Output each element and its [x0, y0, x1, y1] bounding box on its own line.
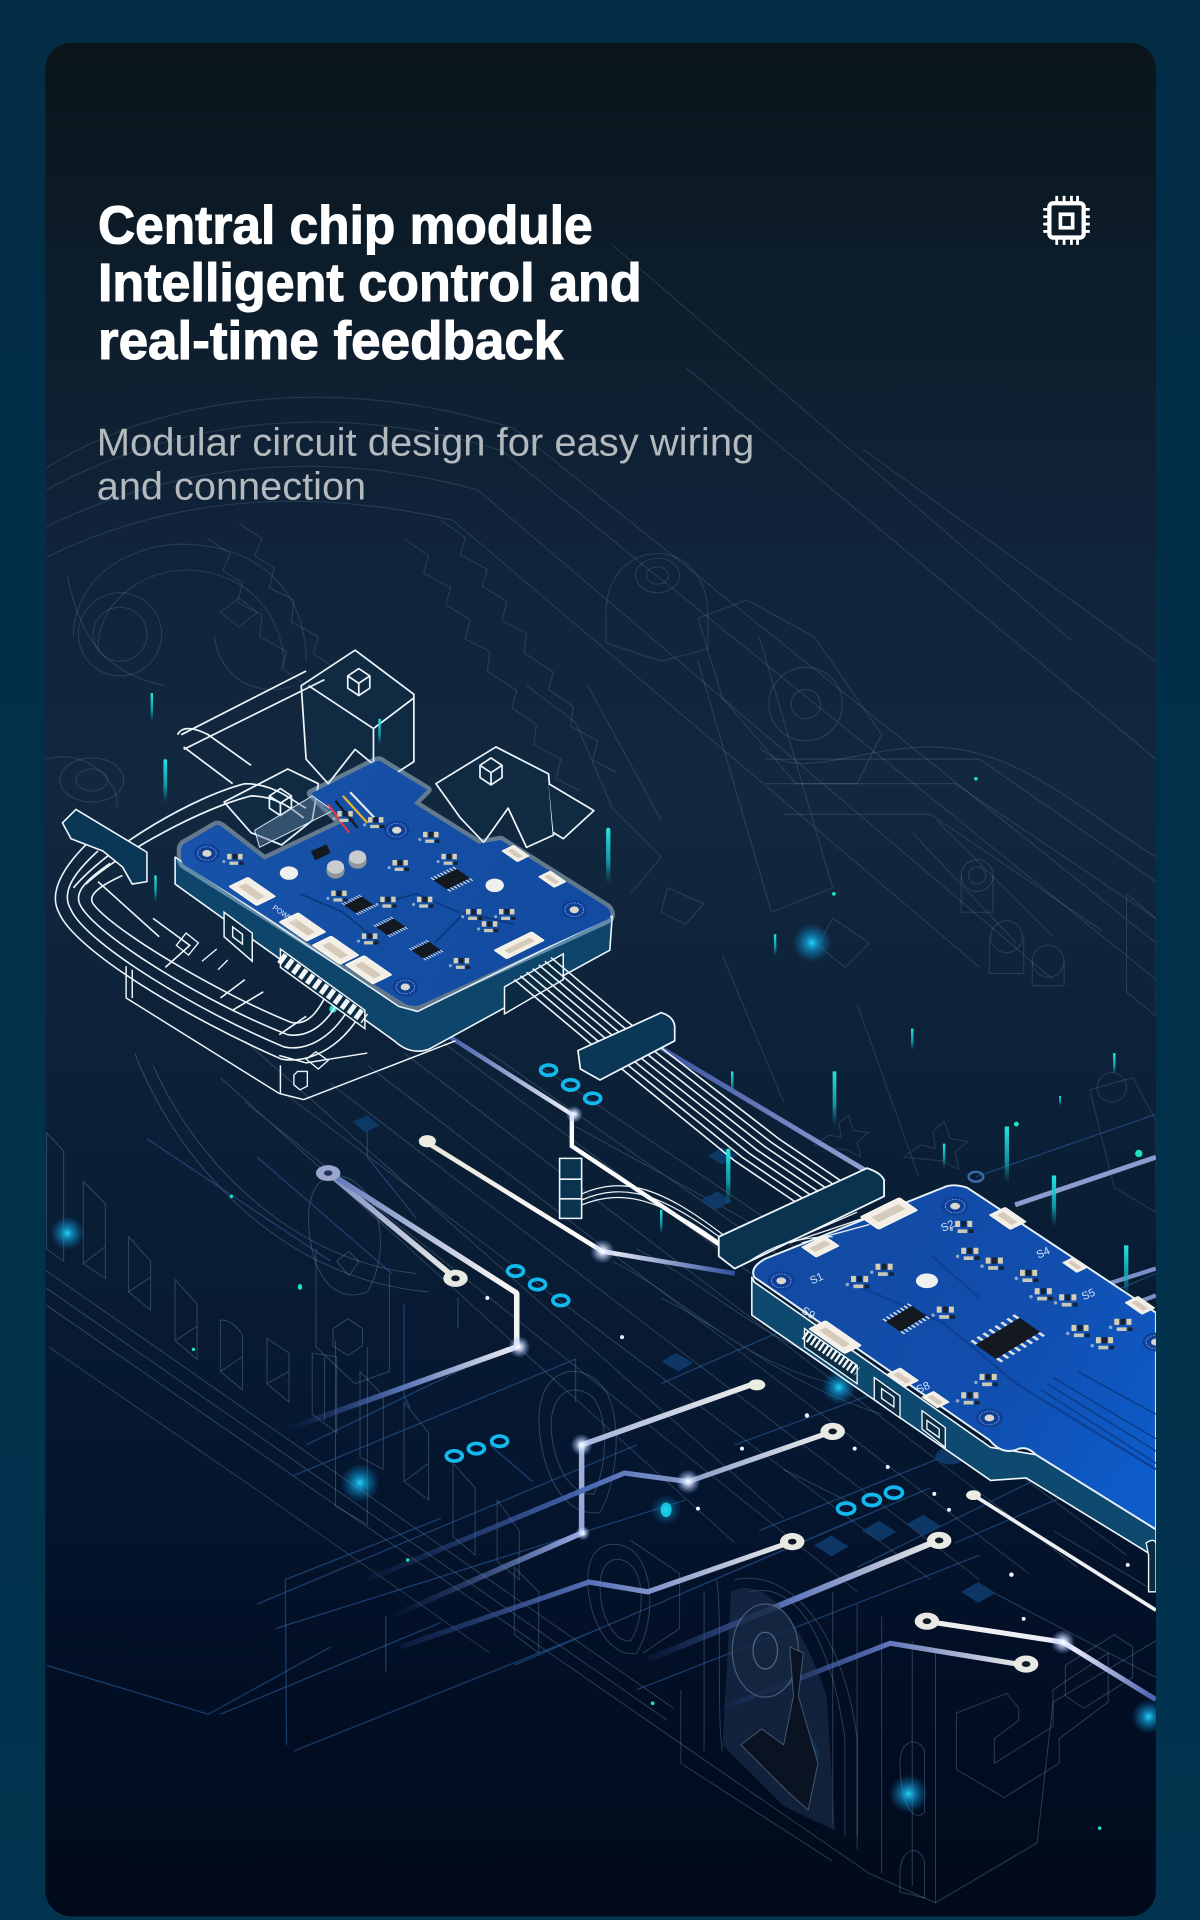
board labels: [799, 1218, 1097, 1396]
circuit trace upper right: [1015, 1157, 1156, 1205]
dark PCB traces: [300, 894, 514, 943]
glow spots: [50, 923, 1166, 1813]
white connectors: [802, 1198, 1155, 1408]
small diamond pads: [353, 1116, 996, 1603]
circuit trace lower right one: [926, 1621, 1156, 1700]
board labels: S9: [799, 1305, 817, 1322]
cable clip: [578, 1013, 675, 1080]
mounting holes: [194, 821, 587, 996]
mounting holes: [768, 1197, 1169, 1427]
board labels: S5: [1080, 1287, 1097, 1303]
subtitle: and connection: [97, 466, 366, 509]
circuit trace beside cable: [649, 1041, 884, 1182]
labels on bracket: [176, 933, 328, 1090]
white holes: [280, 866, 504, 892]
white hole: [916, 1273, 938, 1288]
circuit trace ring to ring: [332, 1180, 450, 1274]
circuit trace lower middle one: [386, 1384, 754, 1619]
small SMD parts: [222, 811, 516, 969]
transparent slot: [255, 796, 333, 847]
title: Central chip module: [98, 196, 593, 256]
connectors: [229, 845, 566, 984]
circuit trace right middle: [1110, 1266, 1156, 1302]
capacitors: [311, 844, 367, 879]
hard-disk style part with arm: [722, 1588, 835, 1831]
servo boxes and wire loops on first board: [73, 650, 594, 888]
board text POWER: POWER: [271, 903, 299, 926]
chips: [343, 868, 472, 959]
trace bend glints: [508, 1106, 1075, 1654]
title: [98, 196, 642, 371]
cyan vertical light bars: [151, 693, 1128, 1297]
cable between clip and board: [749, 1212, 869, 1261]
first board PCB: [181, 761, 611, 1006]
circuit trace behind cable: [448, 1036, 722, 1247]
board labels: S4: [1035, 1245, 1052, 1262]
wireframe: lower diagonal rails and boxes: [47, 1053, 1156, 1903]
circuit trace lower middle four: [649, 1540, 938, 1659]
servo box left: [224, 769, 318, 845]
board labels: S2: [939, 1218, 956, 1235]
thin blue circuit lines: [47, 1114, 1156, 1751]
thin wire from block: [582, 1186, 722, 1244]
title: Intelligent control and: [98, 253, 642, 313]
circuit trace lower middle three: [400, 1542, 792, 1647]
second board side ports: [804, 1329, 1156, 1592]
circuit trace right white diagonal: [973, 1495, 1156, 1610]
small green and white dots: [192, 777, 1142, 1830]
wire cable from first board to second board: [514, 958, 855, 1212]
circuit trace from end cap: [425, 1141, 735, 1273]
second board case side: [752, 1277, 1156, 1558]
first board case side: [175, 857, 612, 1051]
wire loops: [178, 671, 324, 784]
circuit trace lower middle two: [367, 1431, 833, 1580]
lower bracket under first board: [126, 966, 456, 1100]
large display area lines: [1041, 1371, 1156, 1463]
icon: chip: [1043, 196, 1090, 245]
subtitle: Modular circuit design for easy wiring: [97, 422, 754, 465]
board labels: S1: [808, 1271, 825, 1287]
subtitle: [97, 422, 754, 509]
medium chip: [884, 1305, 928, 1333]
wire harness around first board: [55, 845, 367, 1060]
big cable clip at second board: [719, 1168, 884, 1269]
wireframe: upper robot mechanism: [47, 245, 1156, 1212]
trace terminals: [316, 1135, 1038, 1673]
colour wires on connector: [328, 792, 375, 833]
circuit trace lower right two: [722, 1643, 1025, 1708]
circuit trace with vertical drop: [284, 1176, 517, 1430]
PCB traces: [857, 1255, 1156, 1469]
small connector block: [560, 1158, 582, 1218]
servo box right: [436, 747, 553, 847]
clip bracket on wires: [62, 809, 147, 884]
cyan ring triplets: [446, 1065, 902, 1514]
board labels: S8: [915, 1380, 932, 1396]
wireframe: dense diagonal lines behind the traces: [49, 1041, 1156, 1653]
title: real-time feedback: [98, 311, 563, 371]
large chip: [973, 1316, 1043, 1361]
servo box back: [301, 650, 414, 784]
second board PCB: [753, 1185, 1169, 1529]
first board side ports: [224, 912, 563, 1029]
small SMD parts: [846, 1221, 1133, 1404]
